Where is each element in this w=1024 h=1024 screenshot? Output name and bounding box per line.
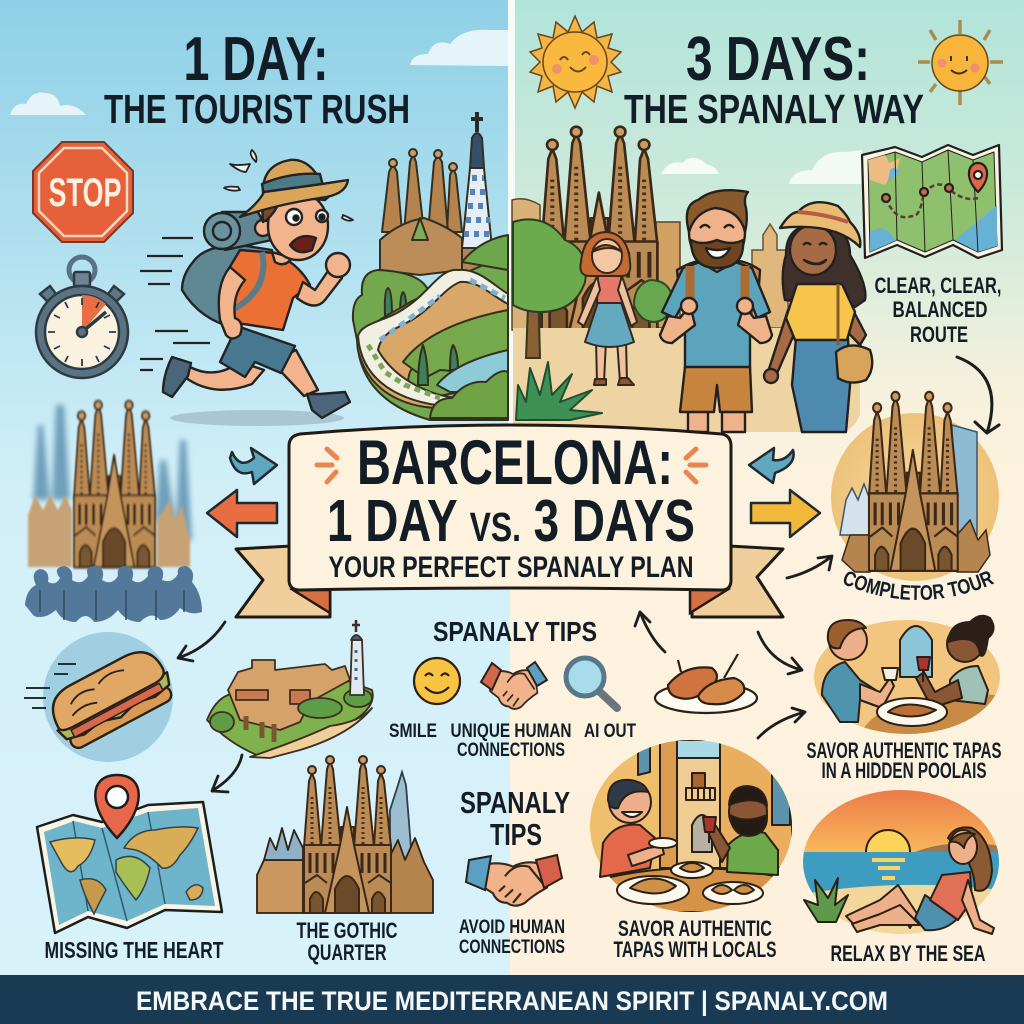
sea — [803, 852, 1001, 894]
sky — [803, 790, 1001, 853]
woman shirt — [950, 666, 988, 704]
icon: folded route map — [862, 145, 1002, 258]
hands — [681, 298, 697, 314]
plates — [617, 876, 689, 904]
caption: completor tour — [844, 571, 994, 600]
blurred ghost spires — [33, 405, 192, 540]
left title — [104, 25, 410, 132]
right man arm — [708, 826, 730, 862]
main cathedral — [304, 756, 391, 913]
spires — [382, 154, 462, 232]
arrow: orange pointing left — [207, 490, 277, 537]
woman hair — [948, 616, 994, 656]
route caption: ROUTE — [910, 322, 968, 347]
central banner: BARCELONA: — [357, 428, 673, 498]
back shoe — [163, 357, 191, 397]
cathedral — [542, 127, 657, 329]
illustration: girl — [578, 232, 637, 385]
arrow: ribbon to cathedral circle — [787, 556, 832, 578]
caption: missing the heart: MISSING THE HEART — [44, 937, 224, 963]
crowd — [25, 566, 202, 622]
wine glass — [703, 817, 716, 843]
man shirt — [822, 662, 885, 722]
central banner: YOUR PERFECT SPANALY PLAN — [328, 551, 694, 584]
head — [689, 197, 745, 267]
small tree — [634, 280, 672, 322]
banner body — [289, 425, 731, 590]
continents — [50, 838, 95, 872]
front shoe — [307, 392, 350, 418]
central banner: 1 DAY VS. 3 DAYS — [327, 488, 695, 554]
strap — [232, 252, 263, 310]
left wing roof — [264, 828, 303, 860]
woman arm — [916, 672, 962, 708]
ear — [255, 220, 271, 236]
arrow: tapas to friends — [758, 708, 805, 738]
caption: tapas with locals: TAPAS WITH LOCALS — [614, 937, 776, 962]
sweat drops — [224, 150, 353, 221]
left title: 1 DAY: — [184, 25, 328, 94]
hair — [783, 225, 865, 307]
speed lines — [140, 238, 210, 370]
straps — [690, 266, 745, 302]
caption: gothic quarter — [296, 918, 398, 965]
backpack — [182, 245, 272, 328]
footer band: EMBRACE THE TRUE MEDITERRANEAN SPIRIT | SPANALY.COM — [136, 986, 888, 1016]
small plate — [649, 838, 677, 848]
man hair — [828, 620, 866, 648]
torso — [930, 872, 972, 920]
illustration: running tourist — [140, 150, 353, 426]
beard — [691, 240, 743, 268]
headland — [915, 844, 998, 852]
plant — [804, 878, 848, 922]
arrow: banner to sandwich — [178, 622, 225, 661]
serpentine viaduct — [358, 272, 508, 408]
ribbon tails — [236, 544, 330, 617]
ribbon folds — [293, 590, 330, 613]
icon: second handshake — [466, 855, 562, 906]
tree — [513, 219, 586, 358]
wings — [28, 495, 190, 567]
tip labels: AI OUT — [584, 721, 636, 742]
man head — [829, 622, 867, 660]
fist — [326, 253, 350, 277]
icon: small sun — [918, 20, 1003, 105]
caption: avoid connections: CONNECTIONS — [459, 937, 565, 958]
clouds — [10, 30, 862, 184]
bag — [836, 345, 872, 383]
hat brim — [240, 180, 348, 217]
hill greenery — [353, 255, 508, 420]
left man arm — [628, 846, 664, 866]
shorts — [220, 326, 295, 377]
tip labels — [389, 721, 636, 761]
legs — [688, 410, 745, 432]
backpack shoulders — [677, 260, 760, 300]
icon: stop sign: STOP — [48, 171, 122, 215]
right man hair and beard — [729, 786, 767, 836]
arrow: yellow pointing right — [751, 490, 820, 537]
caption: tapas with locals: SAVOR AUTHENTIC — [618, 916, 772, 941]
head — [268, 192, 328, 260]
illustration: bearded man — [660, 190, 772, 432]
caption: completor tour: COMPLETOR TOUR — [844, 571, 994, 600]
left wing — [257, 860, 303, 913]
shirt — [662, 262, 770, 370]
window — [900, 626, 932, 677]
facade — [380, 218, 462, 275]
plant — [516, 362, 602, 420]
shirt — [228, 250, 310, 330]
bag strap — [836, 284, 840, 345]
icon: large sun — [530, 16, 621, 108]
hat band — [262, 174, 323, 196]
woman head — [947, 626, 983, 662]
illustration: Park Guell with tower — [353, 112, 508, 420]
sparks — [317, 449, 706, 482]
caption: hidden tapas — [806, 738, 1002, 783]
arrow: small blue pointing right — [230, 448, 277, 484]
checkered tower — [462, 112, 493, 272]
sky — [676, 740, 721, 757]
illustration: cathedral circle — [831, 392, 999, 581]
right title — [624, 25, 924, 132]
back leg — [186, 362, 264, 390]
center wall — [677, 758, 720, 868]
face — [790, 225, 836, 275]
route caption: BALANCED — [892, 297, 988, 322]
arrow: castle to map — [212, 755, 242, 792]
blue tower — [952, 425, 977, 535]
arrow: route to tour — [957, 357, 999, 433]
fringe — [950, 833, 975, 848]
illustration: sunset beach — [803, 790, 1001, 935]
left man hair — [608, 780, 648, 808]
left building — [512, 199, 540, 330]
blue building — [840, 484, 870, 535]
caption: avoid connections — [459, 917, 565, 958]
icon: magnifier — [566, 658, 617, 708]
second tips heading — [460, 785, 570, 852]
right man shirt — [727, 832, 778, 875]
illustration: cathedral and trees on right — [512, 127, 860, 432]
table — [609, 868, 774, 912]
left title: THE TOURIST RUSH — [104, 86, 410, 132]
hand — [764, 369, 778, 383]
arrow: banner to friends — [758, 632, 802, 674]
shirt — [786, 284, 855, 340]
backdrop — [590, 740, 792, 912]
left man shirt — [600, 825, 655, 877]
second tips heading: SPANALY — [460, 785, 570, 820]
right building — [656, 222, 680, 328]
table — [860, 694, 1000, 735]
distant tower — [752, 224, 788, 328]
shorts — [915, 895, 958, 930]
near leg — [852, 905, 920, 932]
route caption — [874, 273, 1002, 347]
pin — [95, 775, 139, 838]
heading: spanaly tips: SPANALY TIPS — [433, 616, 597, 647]
central banner — [236, 425, 783, 617]
caption: gothic quarter: QUARTER — [308, 940, 387, 965]
cathedral — [869, 392, 958, 571]
hat — [780, 202, 860, 247]
tip labels: CONNECTIONS — [457, 740, 565, 761]
icon: stop sign — [33, 142, 133, 242]
right wall — [720, 740, 792, 868]
left man head — [609, 781, 651, 823]
neck — [272, 252, 292, 264]
hat crown — [263, 160, 322, 193]
illustration: friends at table — [814, 616, 1000, 735]
arrow: plate to banner — [635, 612, 665, 652]
background: left half — [0, 0, 510, 976]
icon: smile — [414, 658, 460, 704]
bedroll — [222, 212, 272, 250]
glass and cup — [917, 657, 930, 682]
mouth — [290, 236, 316, 252]
far leg — [846, 885, 918, 928]
man arm — [860, 678, 894, 708]
food — [888, 704, 936, 717]
icon: world map with pin — [37, 775, 222, 933]
water — [437, 350, 508, 392]
ground shadow — [170, 410, 344, 426]
jeans — [792, 338, 850, 432]
illustration: blurred cathedral and crowd — [25, 401, 202, 622]
blue tower — [390, 772, 413, 873]
second tips heading: TIPS — [490, 817, 542, 852]
footer band — [0, 975, 1024, 1024]
icon: stopwatch — [36, 257, 128, 378]
rear arm — [219, 267, 245, 338]
right title: 3 DAYS: — [686, 25, 870, 94]
illustration: gothic cathedral — [257, 756, 433, 913]
plate — [877, 698, 947, 726]
right man head — [729, 789, 767, 835]
hair — [687, 190, 748, 232]
main cathedral — [74, 401, 155, 567]
tip labels: UNIQUE HUMAN — [450, 721, 572, 742]
center divider — [508, 0, 515, 430]
caption: tapas with locals — [614, 916, 776, 962]
eyes — [286, 209, 302, 225]
bottom bush — [430, 371, 508, 418]
arm — [962, 880, 994, 934]
caption: avoid connections: AVOID HUMAN — [459, 917, 565, 938]
inner garden — [403, 310, 508, 378]
caption: gothic quarter: THE GOTHIC — [296, 918, 398, 943]
arrow: small blue pointing left — [749, 448, 794, 483]
illustration: castle on hill — [207, 620, 373, 758]
sun — [865, 829, 911, 852]
arms — [768, 310, 866, 378]
left wall — [660, 740, 677, 868]
front arm — [297, 268, 342, 306]
icon: sandwich — [24, 632, 179, 762]
food — [630, 863, 754, 894]
hair — [262, 190, 334, 222]
sand — [812, 884, 992, 934]
front leg — [272, 350, 318, 396]
background: right half — [510, 0, 1024, 976]
head — [949, 830, 977, 864]
illustration: woman with hat — [764, 202, 872, 432]
arms — [660, 305, 772, 343]
ground — [513, 328, 860, 432]
illustration: tapas with locals — [590, 740, 792, 912]
icon: tapas plate — [655, 654, 757, 713]
icon: handshake — [481, 662, 547, 709]
right wing — [388, 838, 433, 913]
balcony and door — [692, 773, 705, 788]
right title: THE SPANALY WAY — [624, 86, 924, 132]
smile — [706, 248, 730, 258]
hair — [948, 827, 992, 891]
shorts — [680, 367, 752, 412]
tip labels: SMILE — [389, 721, 437, 742]
brown outbuildings — [842, 520, 990, 572]
